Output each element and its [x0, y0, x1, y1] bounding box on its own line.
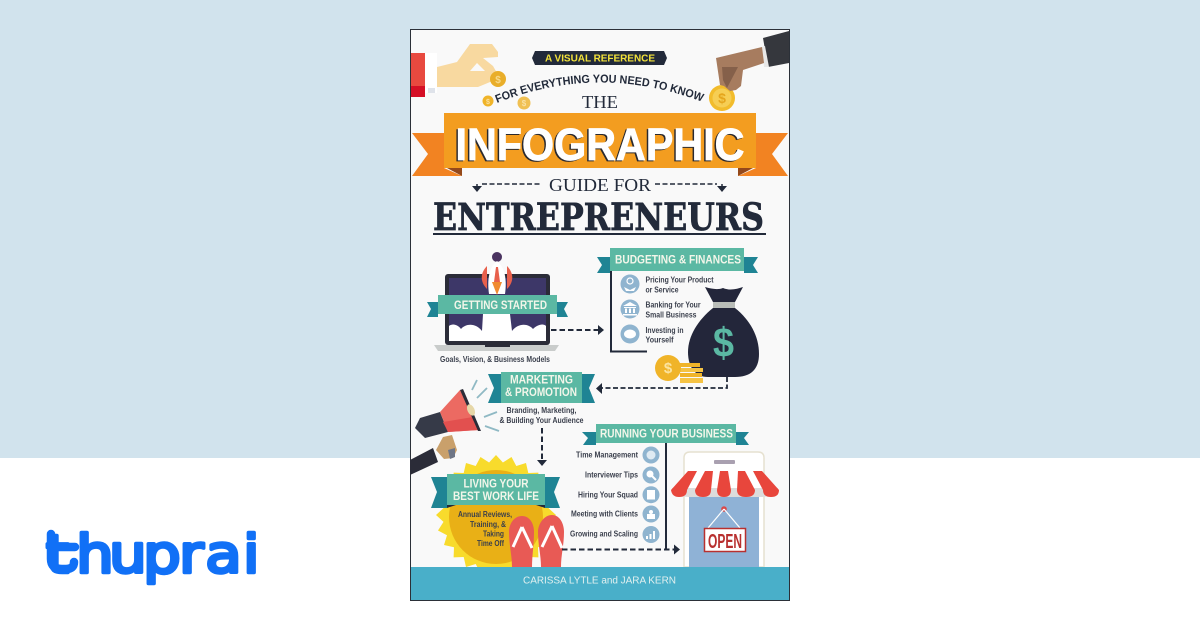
caption: marketing: Branding, Marketing, [506, 406, 576, 415]
icon: left hand with coin: $ [495, 75, 501, 86]
ribbon: getting started: GETTING STARTED [454, 300, 547, 312]
book cover [410, 29, 790, 601]
ribbon: best work life: LIVING YOUR [464, 477, 529, 491]
icon: rocket [482, 252, 512, 295]
ribbon: marketing [488, 372, 595, 403]
icon: growth chart [642, 526, 660, 543]
ribbon: best work life [431, 474, 560, 508]
background band [0, 0, 1200, 458]
section: marketing and promotion [410, 372, 595, 475]
arrow: getting started to budgeting [551, 325, 604, 335]
list: business topics: Hiring Your Squad [578, 491, 638, 500]
caption: work life: Taking [483, 530, 504, 538]
heading: the: THE [582, 92, 618, 112]
author strip: CARISSA LYTLE and JARA KERN [523, 576, 676, 586]
author strip [411, 567, 789, 600]
icon: clients [642, 506, 660, 522]
caption: marketing [500, 406, 584, 425]
list: budgeting topics [646, 276, 714, 344]
ribbon: budgeting: BUDGETING & FINANCES [615, 252, 741, 266]
ribbon: running: RUNNING YOUR BUSINESS [600, 428, 733, 440]
list: business topics: Meeting with Clients [571, 510, 638, 519]
list: budgeting topics: Yourself [646, 336, 674, 344]
icon: money bag: $ [713, 319, 734, 366]
banner: infographic [412, 113, 788, 176]
list: budgeting topics: Banking for Your [646, 301, 700, 310]
list: budgeting topics: or Service [646, 286, 679, 294]
badge: a visual reference: A VISUAL REFERENCE [545, 54, 655, 64]
section: getting started laptop [427, 252, 568, 364]
icon: sun [436, 455, 556, 575]
awning [671, 471, 779, 497]
icon: profile [642, 486, 660, 503]
heading: guide for with arrows: GUIDE FOR [549, 175, 651, 195]
arrow: budgeting to marketing [596, 377, 727, 394]
list: business topics: Interviewer Tips [585, 471, 638, 480]
list: budgeting topics: Pricing Your Product [646, 276, 714, 284]
icon: open shop phone [671, 452, 779, 567]
arrow: marketing to work life [537, 428, 547, 466]
caption: marketing: & Building Your Audience [500, 416, 584, 425]
ribbon: best work life: BEST WORK LIFE [453, 489, 539, 503]
curved subtitle: FOR EVERYTHING YOU NEED TO KNOW [494, 74, 705, 103]
section: living your best work life [431, 455, 564, 575]
icon: piggy bank [620, 324, 640, 344]
ribbon: getting started [427, 295, 568, 317]
heading: entrepreneurs: ENTREPRENEURS [433, 195, 764, 239]
ribbon: marketing: & PROMOTION [505, 387, 577, 399]
caption: work life: Annual Reviews, [458, 510, 512, 519]
icon: left hand with coin [411, 44, 506, 97]
heading: guide for with arrows [472, 175, 727, 195]
badge: a visual reference [532, 51, 667, 65]
ribbon: marketing: MARKETING [510, 374, 573, 386]
icon: clock [642, 446, 660, 464]
icon: bank [620, 300, 640, 318]
caption: getting started: Goals, Vision, & Business Models [440, 355, 550, 364]
icon: gold coins [655, 355, 703, 383]
list: business topics: Time Management [576, 451, 638, 460]
arrow: work life to open shop [562, 544, 680, 554]
caption: work life: Training, & [470, 520, 506, 529]
icon: gold coins: $ [664, 360, 673, 377]
banner: infographic: INFOGRAPHIC [456, 119, 744, 170]
section: budgeting and finances [597, 248, 759, 383]
banner: infographic: INFOGRAPHIC [454, 120, 743, 171]
logo: thuprai: thuprai [46, 524, 260, 586]
icon: magnifier [642, 466, 660, 484]
list: business topics [570, 451, 638, 539]
ribbon: running [582, 424, 749, 445]
list: business topics: Growing and Scaling [570, 530, 638, 539]
icon: falling coins: $ [522, 99, 527, 108]
icon: right hand with coin: $ [718, 90, 726, 106]
icon: falling coins [482, 96, 530, 110]
icon: money bag [688, 287, 759, 377]
icon: falling coins: $ [486, 99, 490, 106]
caption: work life [458, 510, 512, 548]
open sign: OPEN [708, 531, 742, 553]
icon: flip flops [509, 515, 564, 567]
icon: right hand with coin [709, 31, 789, 111]
icon: pricing [620, 274, 640, 294]
caption: work life: Time Off [477, 539, 504, 548]
icon: megaphone [410, 380, 499, 475]
list: budgeting topics: Small Business [646, 310, 697, 320]
list: budgeting topics: Investing in [646, 326, 684, 335]
ribbon: budgeting [597, 248, 758, 273]
section: running your business [570, 424, 749, 549]
